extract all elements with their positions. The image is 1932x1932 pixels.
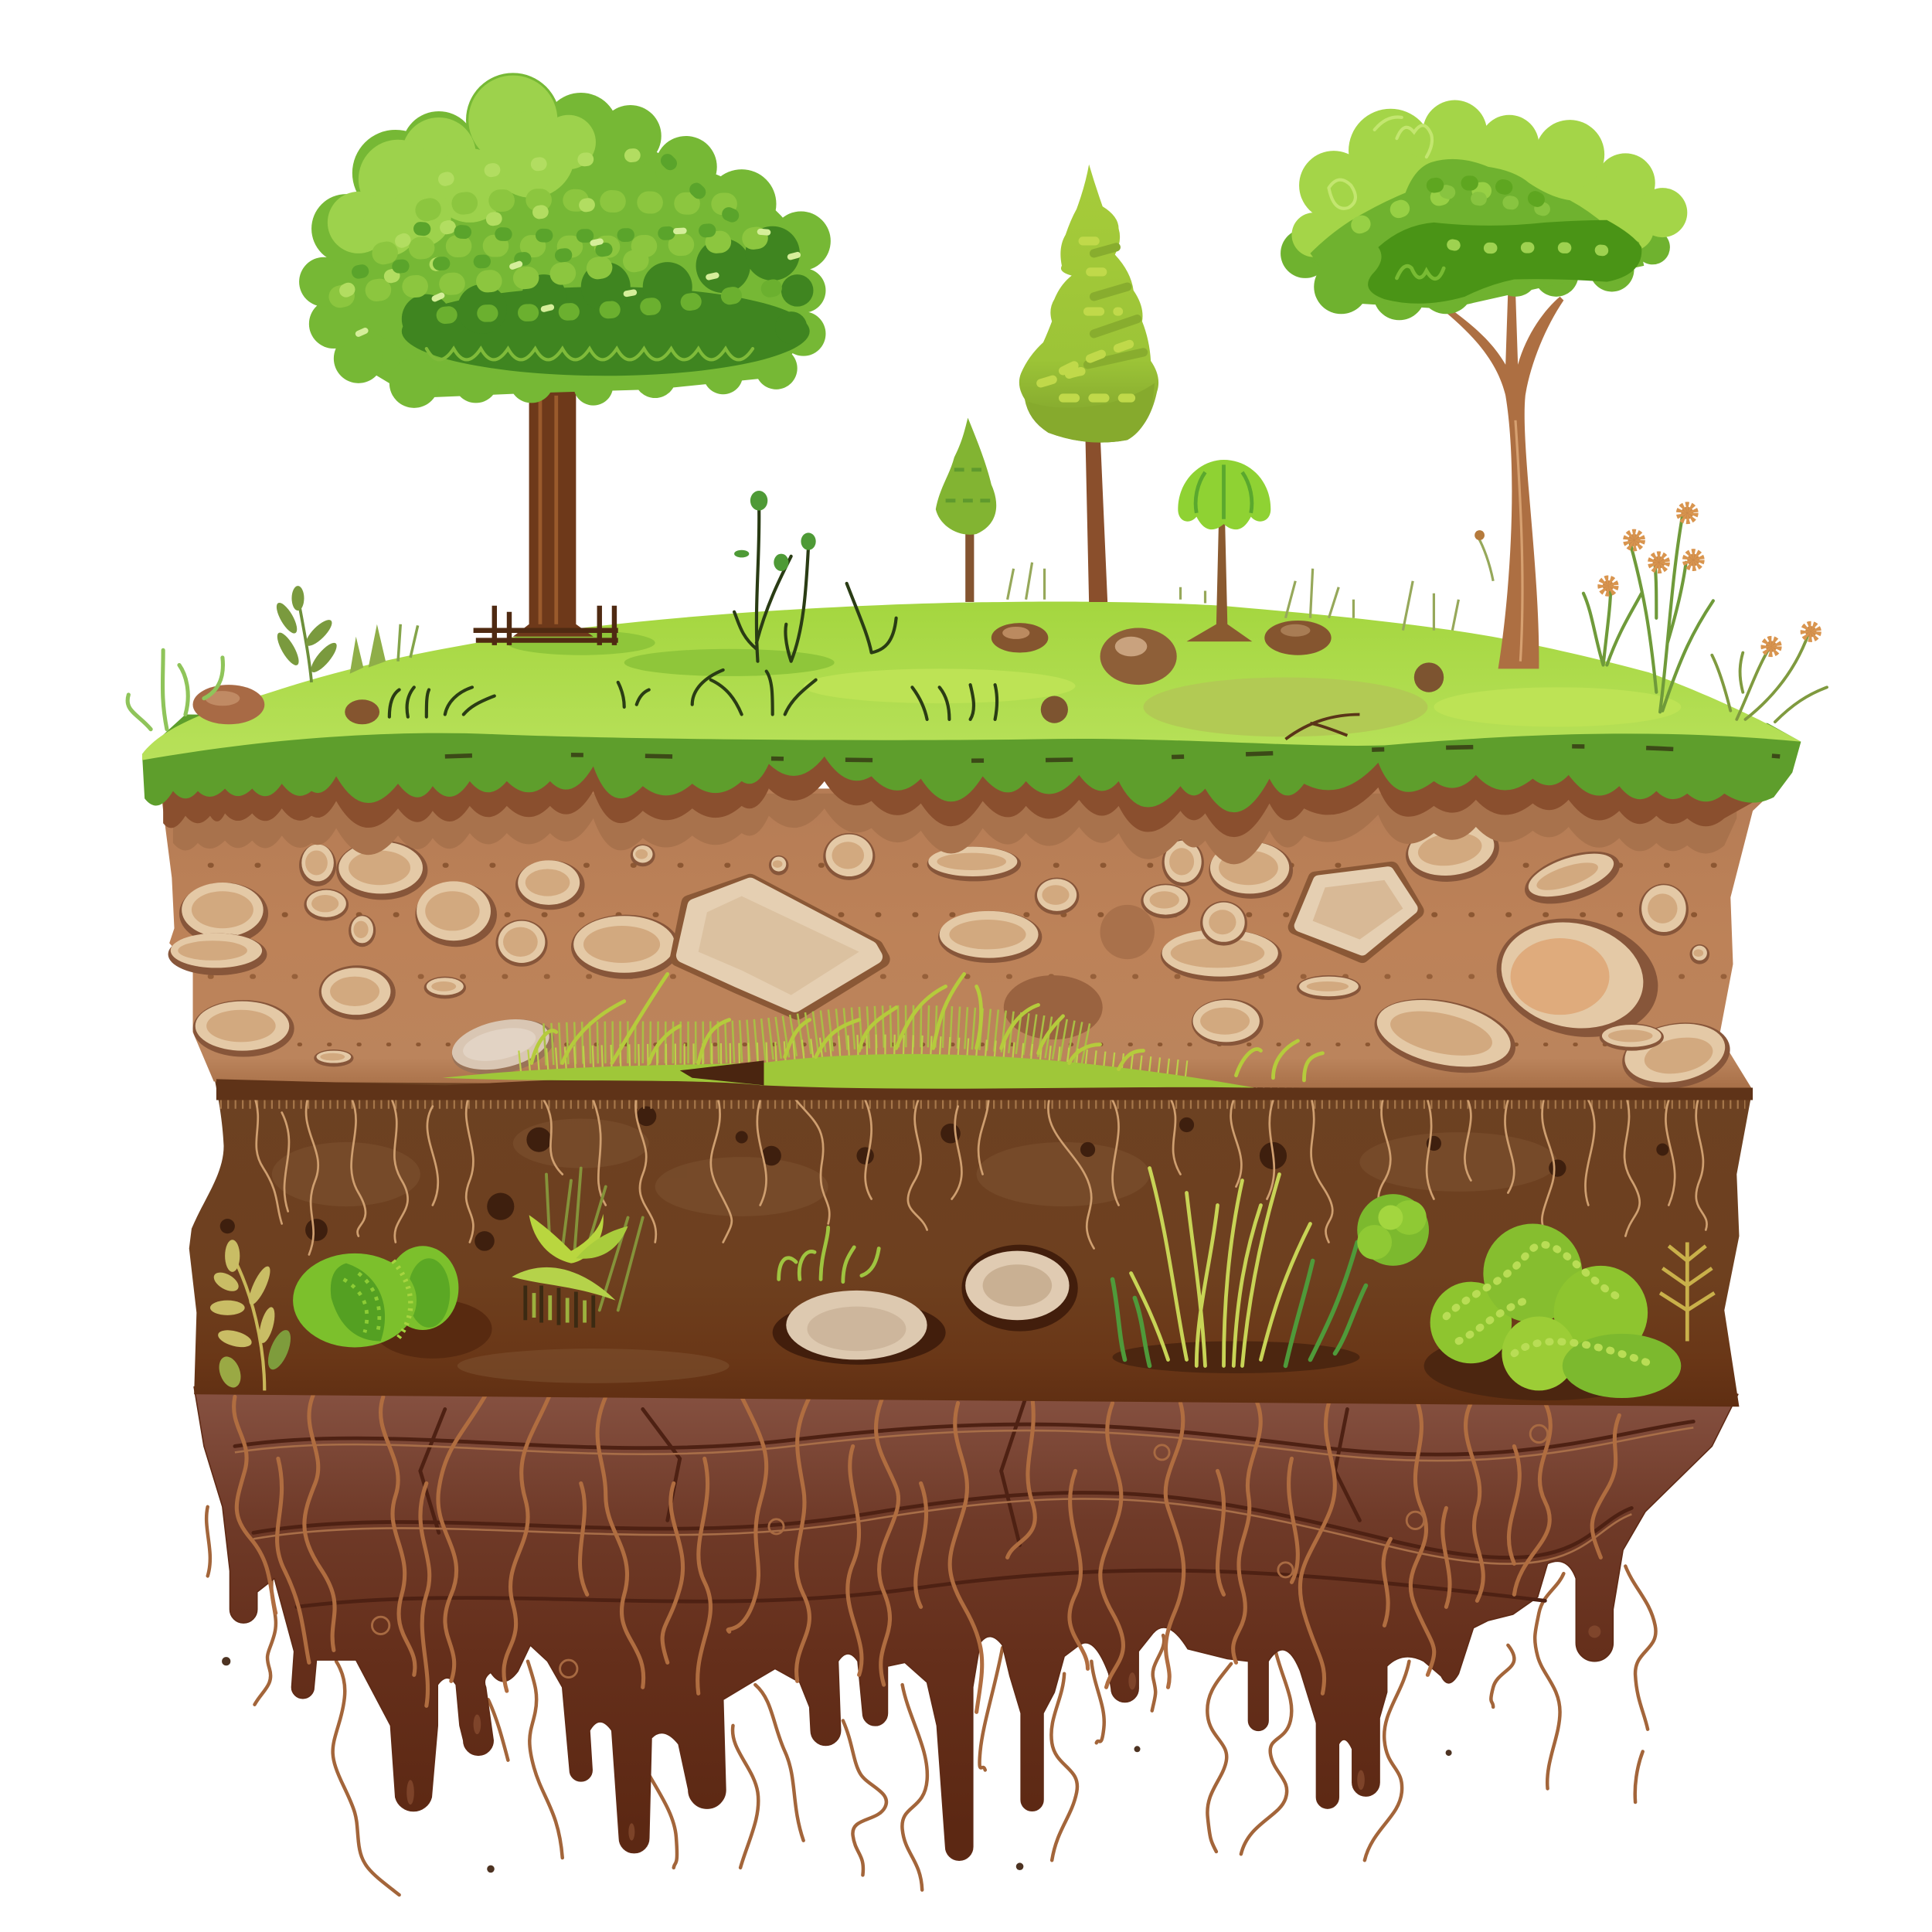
dark pebbles <box>220 1107 1668 1251</box>
green fringe <box>142 715 1801 812</box>
icon: small bush <box>1357 1194 1429 1266</box>
root spirals <box>372 1425 1548 1678</box>
rock: lower boulder <box>773 1291 946 1365</box>
rocks <box>168 816 1735 1097</box>
medium conifer <box>1019 165 1158 602</box>
crown dark band <box>1368 220 1641 304</box>
layer: deep soil with dripping edge <box>194 1387 1738 1860</box>
small conifer <box>936 418 996 602</box>
drip highlights <box>406 1625 1600 1841</box>
crown upper lobes <box>1291 100 1687 257</box>
icon: bush cluster <box>1424 1223 1681 1400</box>
icon: tall grass clump <box>1113 1168 1366 1373</box>
icon: right fern <box>1660 1242 1714 1341</box>
crown dark lower <box>402 226 813 376</box>
dark soil boundary <box>216 1070 1753 1100</box>
dark detail streaks <box>445 747 1780 760</box>
root mat at layer top <box>220 1090 1745 1104</box>
flowers and grasses at right <box>1008 507 1827 722</box>
crown lower lobes <box>1281 192 1670 320</box>
soil specks <box>210 864 1730 867</box>
crown base <box>299 73 831 408</box>
stones on the grass <box>193 621 1444 724</box>
fine roots <box>253 1094 1707 1254</box>
pale soil wash under fringe <box>173 794 1736 864</box>
icon: left fern <box>210 1240 295 1390</box>
layer: subsoil with fine roots <box>189 1076 1753 1406</box>
crown texture <box>340 155 804 359</box>
sprouts <box>734 491 816 662</box>
icon: moss mound <box>293 1246 492 1359</box>
soil shadow fringe <box>163 754 1755 837</box>
lighter soil blotches <box>272 1119 1557 1383</box>
trunk <box>1434 291 1563 668</box>
large tree <box>299 73 831 645</box>
bright grass <box>142 602 1801 760</box>
rock: large central boulder <box>679 883 881 1011</box>
cracks <box>235 1396 1693 1607</box>
tall tree right <box>1281 100 1687 668</box>
layer: topsoil <box>161 785 1780 1100</box>
crown <box>299 73 831 408</box>
small soil dots <box>222 1657 1452 1872</box>
tufts at left edge <box>128 586 418 730</box>
layer: grass top surface <box>142 491 1801 864</box>
crown light upper <box>328 76 596 256</box>
trunk <box>474 371 618 645</box>
mushroom-shaped tree <box>1178 460 1270 641</box>
grass blades <box>389 583 1359 739</box>
icon: small grass tuft <box>779 1227 879 1282</box>
crown <box>1281 100 1687 320</box>
thick roots <box>234 1390 1619 1712</box>
hanging thin roots <box>206 1507 1656 1895</box>
crown mid-green band <box>1310 159 1644 309</box>
icon: leafy plant <box>512 1168 643 1328</box>
buried grass band <box>443 974 1322 1089</box>
rock: angular boulder <box>1295 869 1417 955</box>
rock: upper boulder <box>961 1245 1078 1332</box>
crown texture <box>1328 117 1625 279</box>
grass patches <box>624 649 835 676</box>
